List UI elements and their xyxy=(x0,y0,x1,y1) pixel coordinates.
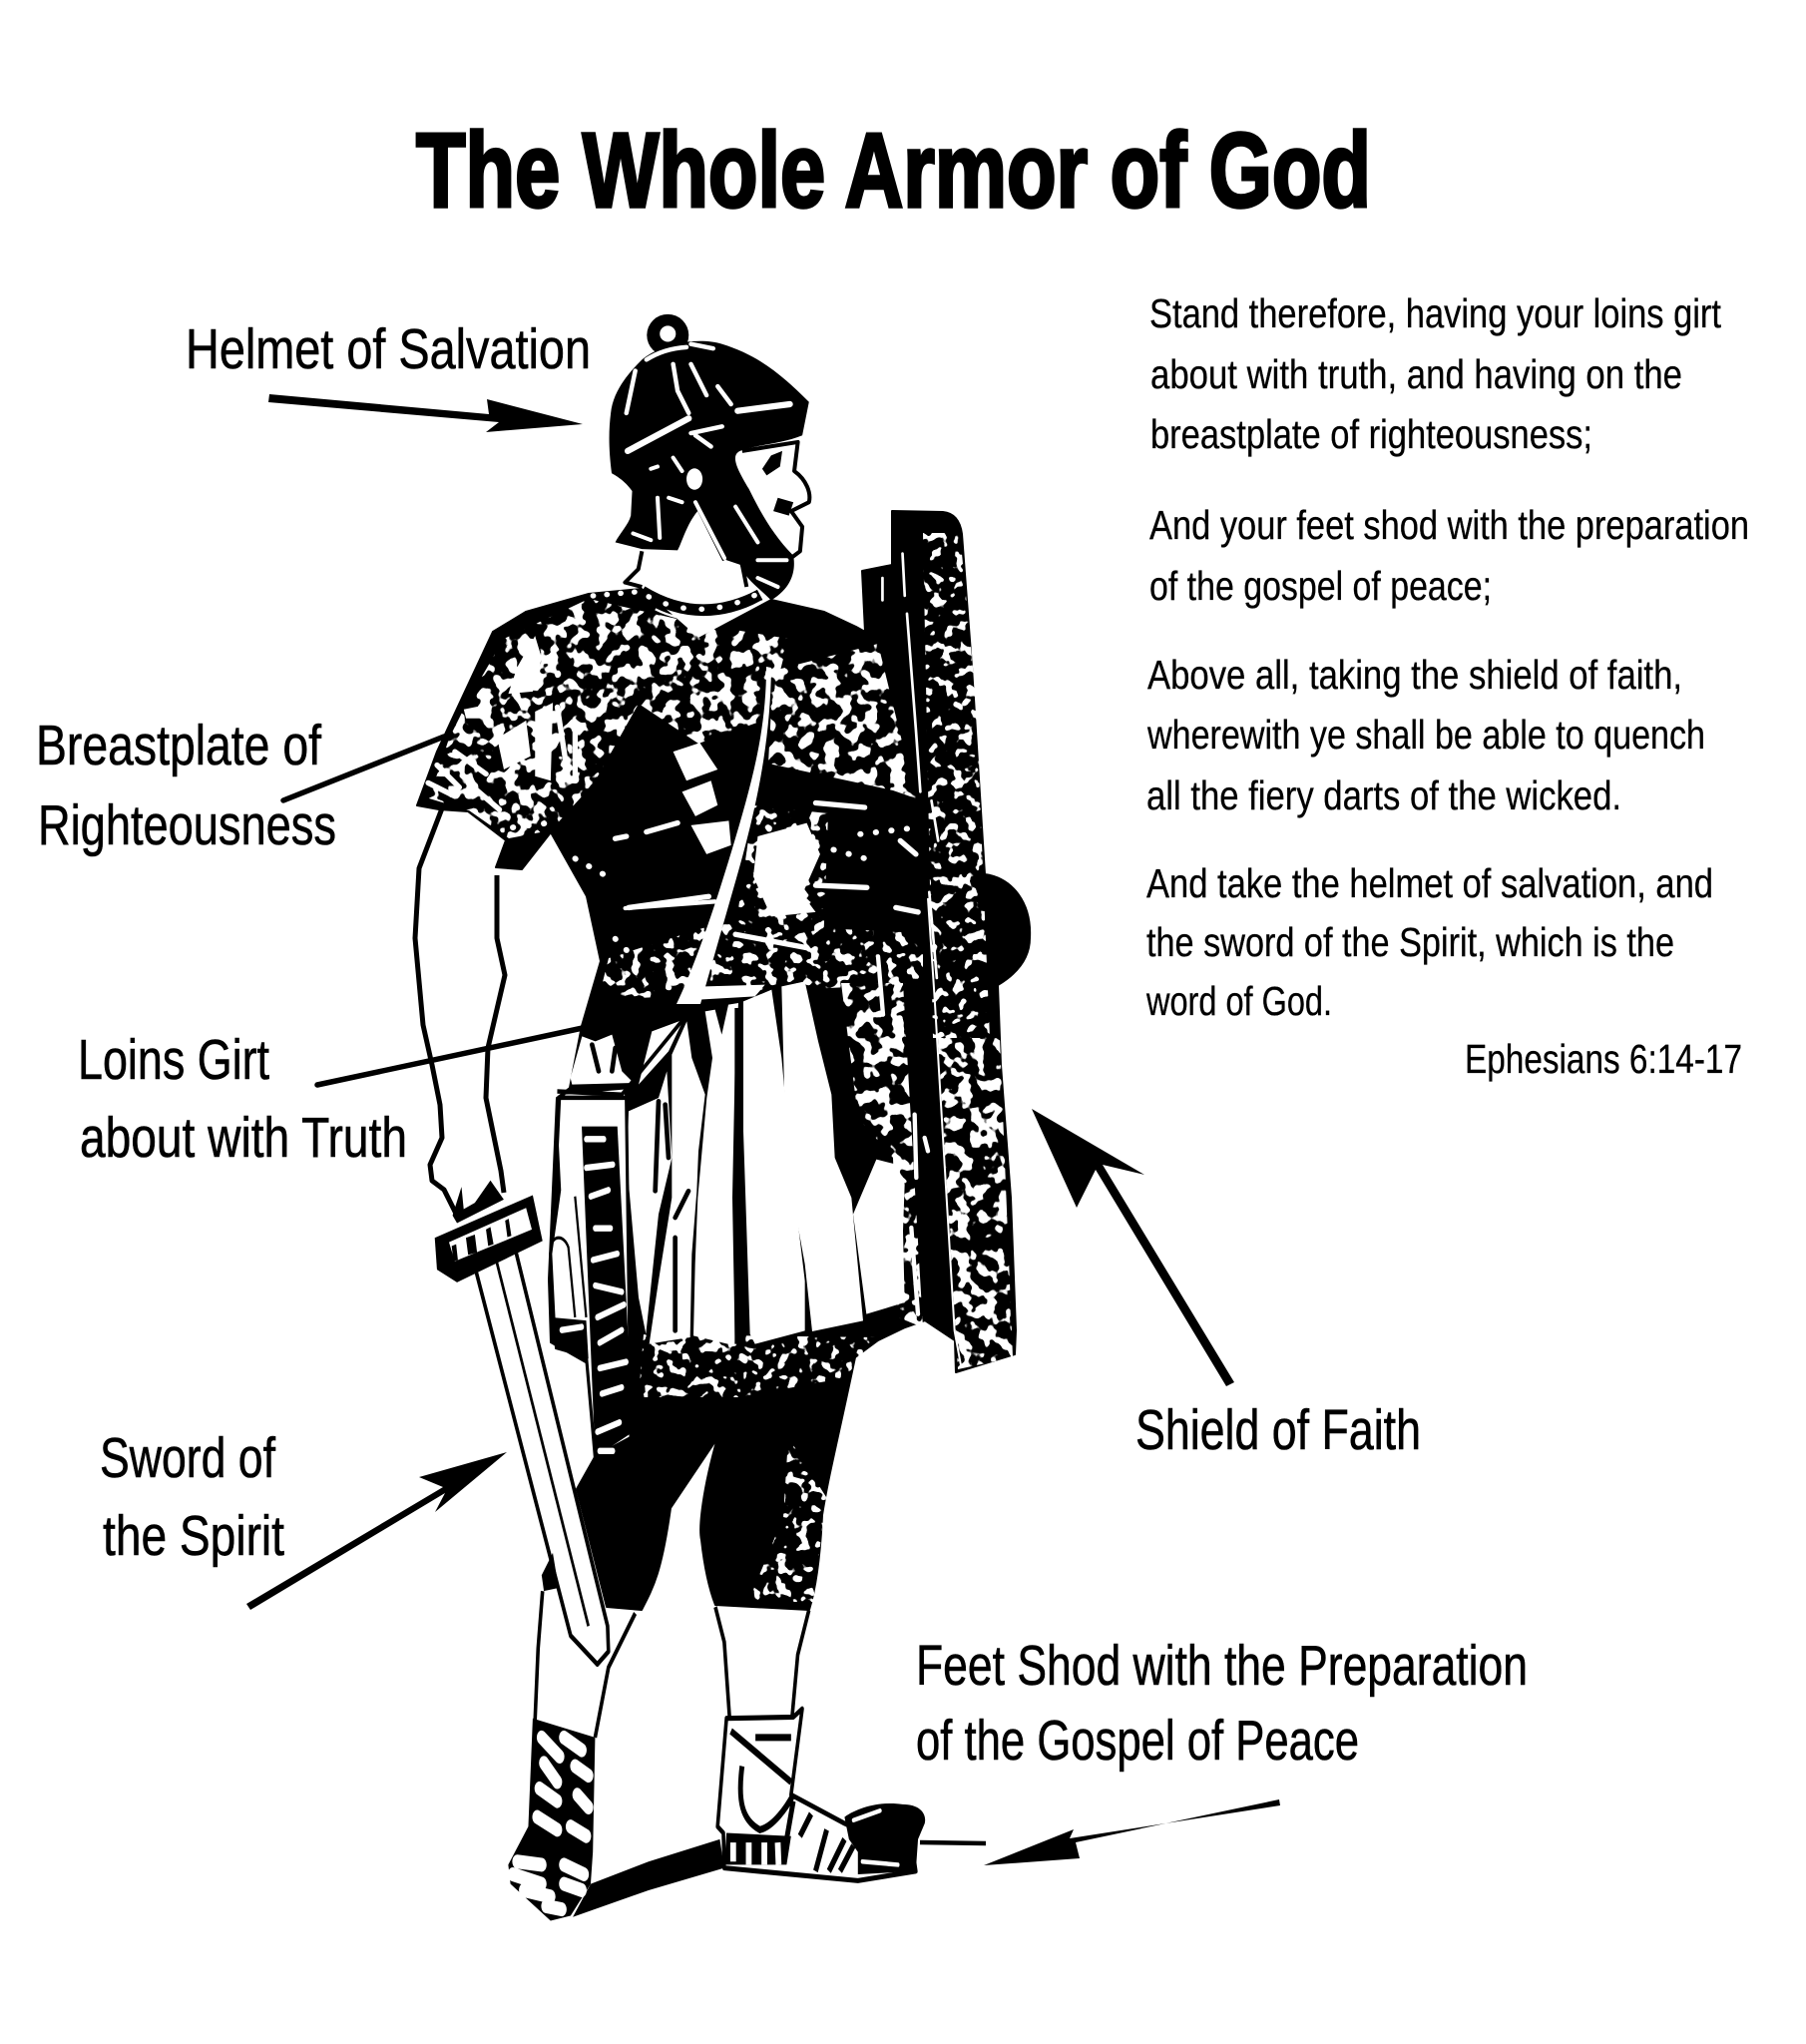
title: The Whole Armor of God xyxy=(416,112,1371,230)
label: Sword of the Spirit: the Spirit xyxy=(103,1504,284,1568)
sword belt frame xyxy=(557,1018,684,1095)
scripture passage: breastplate of righteousness; xyxy=(1150,411,1592,457)
scripture passage: of the gospel of peace; xyxy=(1149,563,1492,609)
label: Feet Shod: of the Gospel of Peace xyxy=(916,1709,1359,1773)
ground shadow xyxy=(573,1839,724,1917)
soldier illustration xyxy=(409,314,1030,1921)
right sandal xyxy=(717,1709,916,1880)
speckled texture on armour xyxy=(409,529,1023,1607)
collar xyxy=(593,591,762,620)
scripture passage: all the fiery darts of the wicked. xyxy=(1146,772,1621,818)
object by foot xyxy=(844,1803,925,1874)
label: Loins Girt about with Truth xyxy=(78,1028,407,1170)
line from foot xyxy=(920,1842,986,1843)
left sandal xyxy=(508,1719,595,1921)
label: Sword of the Spirit xyxy=(100,1426,284,1568)
label: Feet Shod xyxy=(916,1634,1528,1773)
scripture passage: about with truth, and having on the xyxy=(1150,351,1682,397)
sword xyxy=(435,1181,609,1665)
scripture passage: wherewith ye shall be able to quench xyxy=(1146,712,1705,758)
arrow: feet xyxy=(984,1799,1280,1865)
scripture passage: the sword of the Spirit, which is the xyxy=(1146,919,1674,965)
helmet and cheek guard xyxy=(610,314,809,600)
kilt with pleats xyxy=(564,898,961,1367)
scripture passage: Ephesians 6:14-17 xyxy=(1465,1036,1742,1082)
scabbard and pouch xyxy=(551,1018,684,1457)
arm outline xyxy=(415,808,505,1216)
fingers on hilt xyxy=(453,1181,504,1224)
label: Helmet of Salvation: Helmet of Salvation xyxy=(186,317,591,381)
scripture passage: word of God. xyxy=(1145,978,1332,1024)
label: Breastplate of Righteousness: Righteousness xyxy=(38,793,336,857)
scripture passage: And take the helmet of salvation, and xyxy=(1146,860,1713,906)
scripture passage: Above all, taking the shield of faith, xyxy=(1147,652,1682,698)
label: Shield of Faith: Shield of Faith xyxy=(1135,1398,1421,1462)
line: breastplate xyxy=(283,737,444,800)
label: Breastplate of Righteousness: Breastplate of xyxy=(36,714,321,777)
legs and sandals xyxy=(508,1553,925,1921)
scripture passage xyxy=(1145,290,1749,1082)
diagonal sash strap xyxy=(677,667,771,1004)
label: Loins Girt about with Truth: Loins Girt xyxy=(78,1028,269,1092)
line: loins xyxy=(317,1028,583,1085)
tunic, kilt and shield silhouette xyxy=(417,511,1030,1610)
arrow: shield xyxy=(1032,1109,1234,1386)
label: Breastplate of Righteousness xyxy=(36,714,336,857)
label: Loins Girt about with Truth: about with Truth xyxy=(80,1106,407,1170)
arrow: sword xyxy=(246,1452,507,1610)
tunic and breastplate shapes xyxy=(428,591,918,952)
arrow: helmet xyxy=(268,394,583,432)
label: Sword of the Spirit: Sword of xyxy=(100,1426,275,1490)
label: Feet Shod: Feet Shod with the Preparation xyxy=(916,1634,1528,1698)
shield lines xyxy=(882,554,938,978)
